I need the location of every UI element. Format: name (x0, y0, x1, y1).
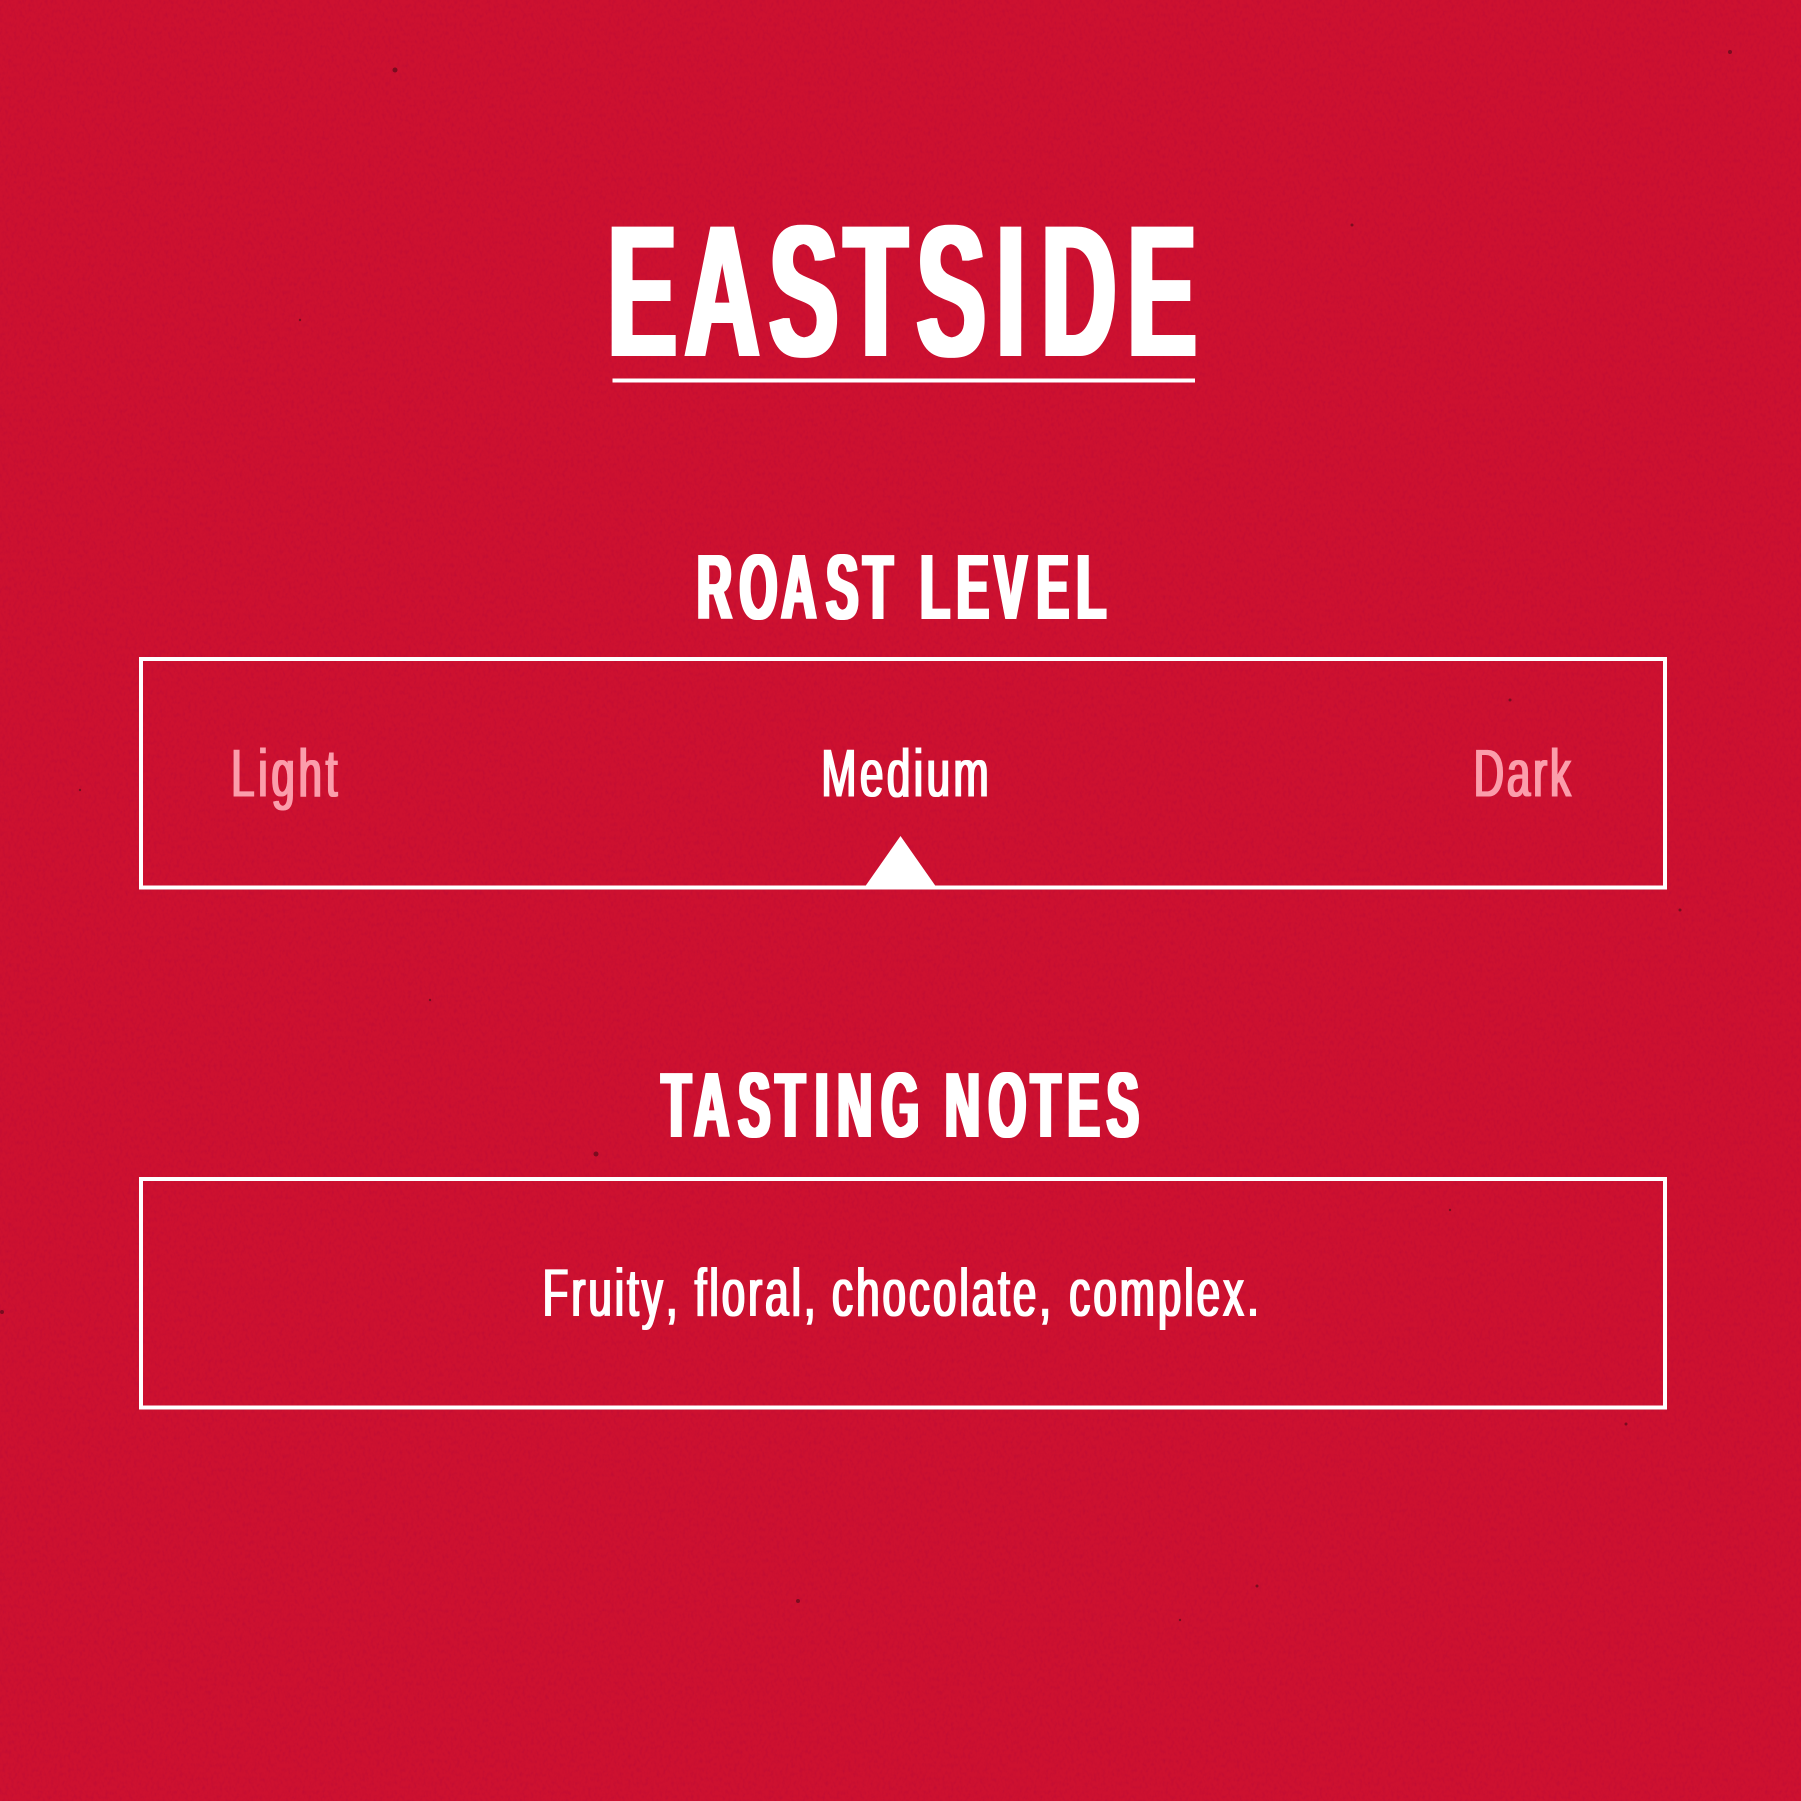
icon: triangle marker (863, 836, 938, 890)
text: tasting notes description: floral, (695, 1255, 833, 1330)
panel: roast level scale (141, 659, 1665, 890)
text: tasting notes description: chocolate, (832, 1255, 1069, 1330)
title: EASTSIDE (608, 187, 1196, 397)
label: dark: Dark (1474, 735, 1574, 811)
text: tasting notes description: Fruity, (543, 1255, 695, 1330)
text: tasting notes description: complex. (1069, 1255, 1262, 1330)
heading: roast level: ROAST LEVEL (697, 535, 1106, 639)
heading: tasting notes: TASTING NOTES (661, 1053, 1139, 1157)
text: tasting notes description (543, 1255, 1262, 1330)
label: medium: Medium (821, 735, 992, 811)
panel: tasting notes (141, 1179, 1665, 1408)
label: light: Light (231, 735, 341, 811)
